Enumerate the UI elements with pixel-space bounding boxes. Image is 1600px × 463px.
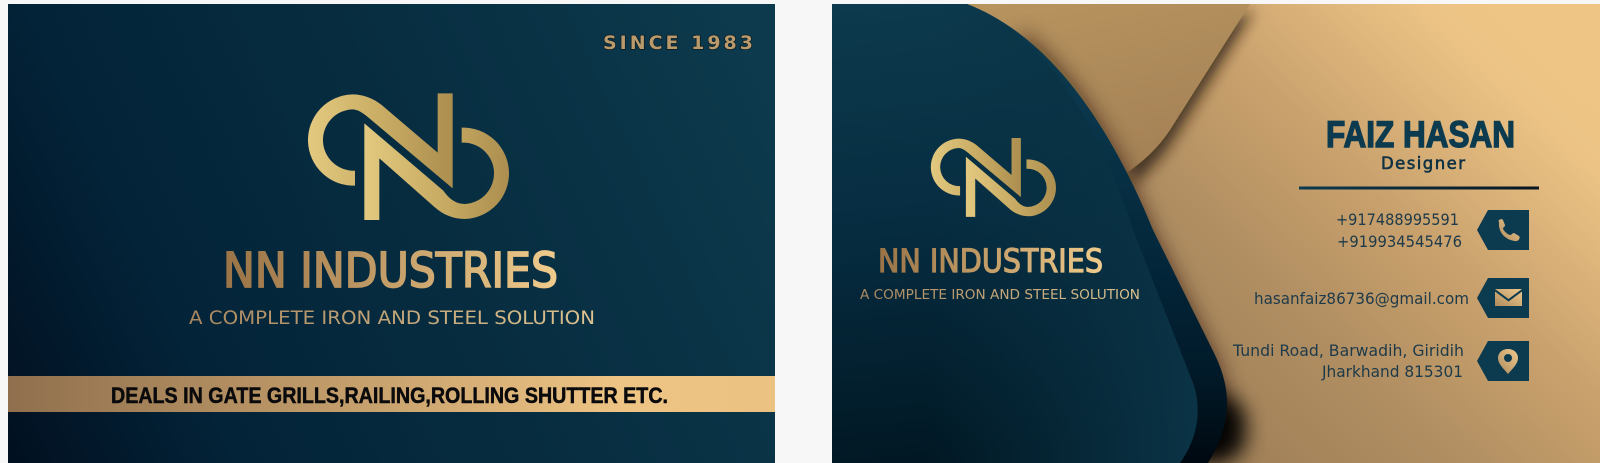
flap shadow [1105,10,1254,184]
job title: Designer [1381,154,1465,173]
tagline: A COMPLETE IRON AND STEEL SOLUTION [189,307,595,329]
phone numbers: +917488995591 [1336,210,1459,229]
banner text: DEALS IN GATE GRILLS,RAILING,ROLLING SHUTTER ETC. [111,383,668,408]
address [1232,341,1464,381]
address: Jharkhand 815301 [1321,362,1463,381]
back curved layer [967,4,1227,463]
address: Tundi Road, Barwadih, Giridih [1232,341,1464,360]
company name: NN INDUSTRIES [878,242,1103,280]
dark bottom shadow [1180,395,1246,463]
flap [1054,4,1250,172]
tan background [1126,4,1600,463]
shadow behind curve [1000,30,1227,460]
panel: back of card [832,4,1600,463]
phone numbers: +919934545476 [1337,232,1462,251]
logo: NN monogram [308,93,509,220]
front layer lighter right tone [994,244,1198,463]
panel: front of card [8,4,775,463]
divider rule [1299,186,1539,190]
icon: envelope [1477,278,1529,318]
email: hasanfaiz86736@gmail.com [1254,289,1469,308]
front curved layer [832,4,1085,463]
person name: FAIZ HASAN [1326,114,1515,155]
phone numbers [1338,214,1462,247]
icon: location pin [1477,341,1529,381]
card background [8,4,775,463]
icon: phone [1477,210,1529,250]
tagline: A COMPLETE IRON AND STEEL SOLUTION [860,288,1140,303]
logo: small NN monogram [931,138,1056,217]
banner [8,376,775,412]
since badge: SINCE 1983 [603,32,753,54]
company name: NN INDUSTRIES [223,243,558,299]
